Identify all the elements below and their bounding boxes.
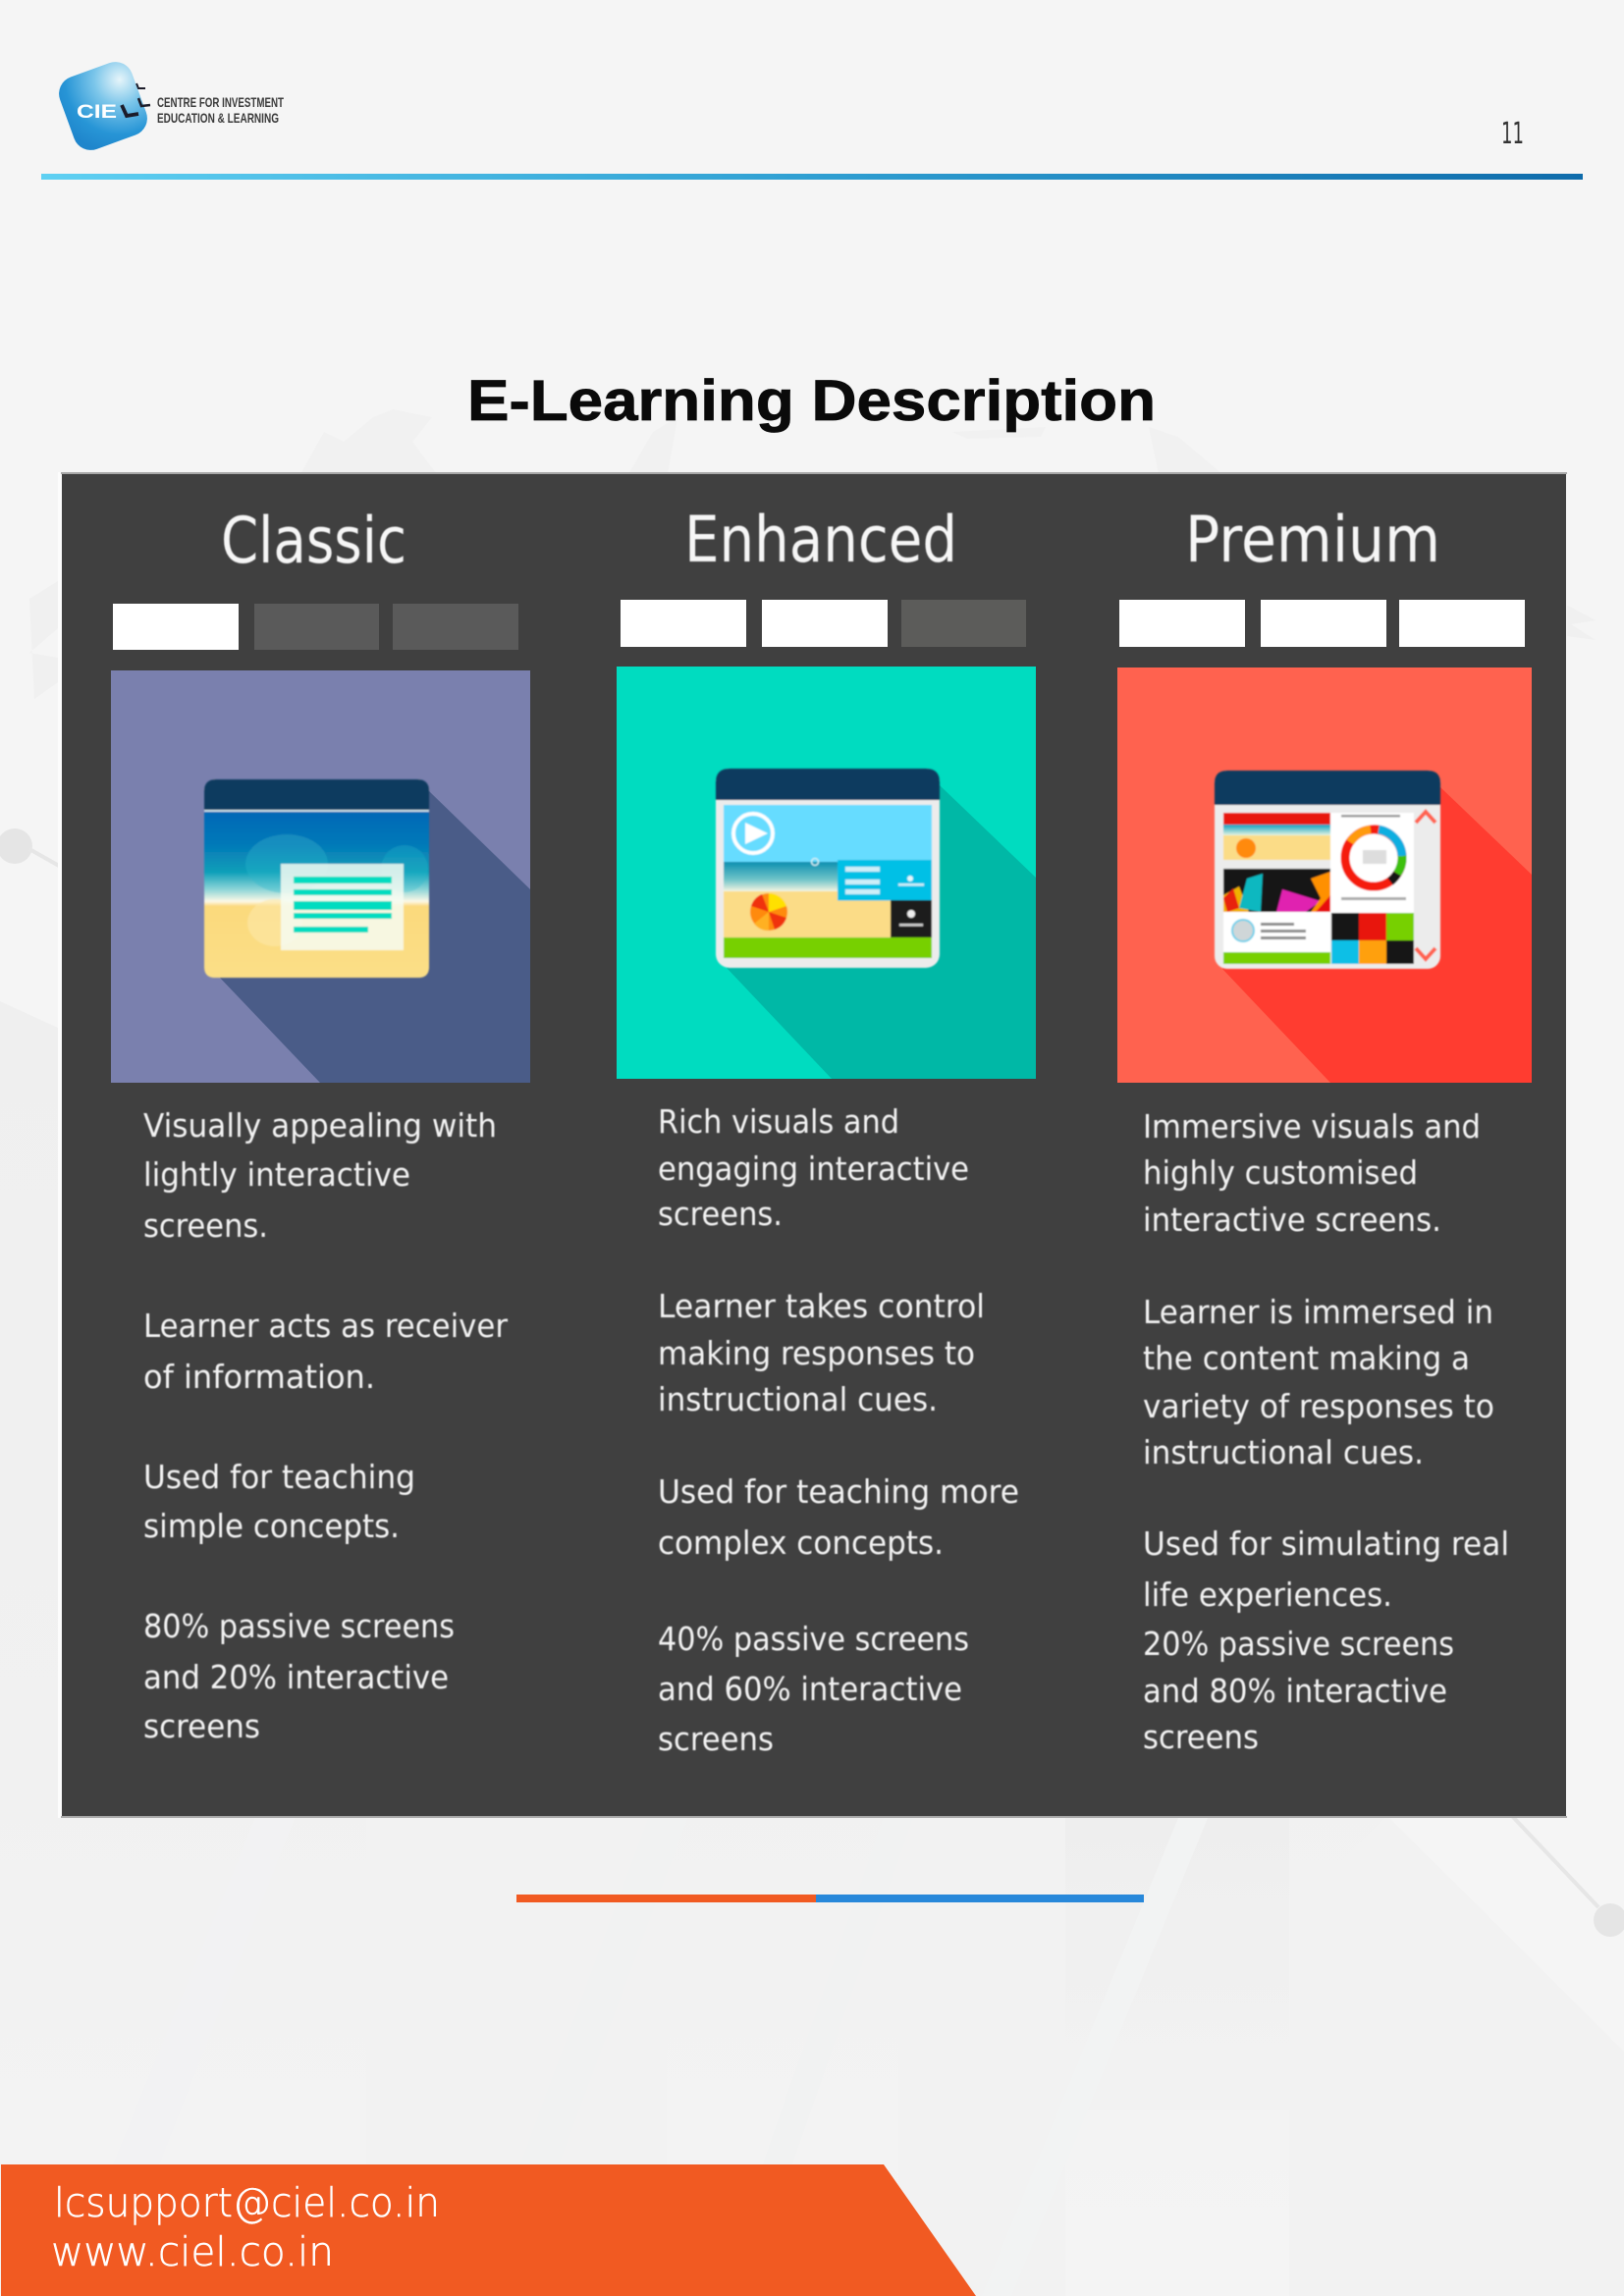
heading: Premium: Premium <box>1185 504 1440 577</box>
text block: enhanced description: and 60% interactive <box>658 1670 962 1708</box>
text block: classic description: and 20% interactive <box>143 1658 449 1696</box>
column: Classic <box>111 505 530 1745</box>
footer email: lcsupport@ciel.co.in <box>54 2179 440 2226</box>
text block: enhanced description: 40% passive screens <box>658 1620 969 1658</box>
text block: classic description: simple concepts. <box>143 1507 400 1545</box>
text block: enhanced description <box>658 1102 1019 1758</box>
logo wordmark <box>157 94 284 126</box>
text block: classic description: 80% passive screens <box>143 1607 455 1645</box>
text block: enhanced description: Rich visuals and <box>658 1102 899 1141</box>
text block: premium description: and 80% interactive <box>1143 1672 1447 1710</box>
column: Premium <box>1117 504 1532 1756</box>
text block: enhanced description: instructional cues. <box>658 1380 938 1418</box>
illustration: premium screen tile <box>1117 667 1532 1083</box>
illustration: enhanced screen tile <box>617 667 1036 1079</box>
text block: enhanced description: engaging interactive <box>658 1149 969 1188</box>
text block: classic description: Learner acts as receiver <box>143 1307 508 1345</box>
footer: contact banner <box>1 2164 976 2296</box>
text block: enhanced description: screens <box>658 1720 774 1758</box>
text block: premium description: 20% passive screens <box>1143 1625 1454 1663</box>
text block: premium description: variety of responses to <box>1143 1387 1494 1425</box>
text block: premium description: instructional cues. <box>1143 1433 1424 1471</box>
level indicator: two of three <box>621 600 1026 647</box>
text block: premium description: Learner is immersed in <box>1143 1293 1493 1331</box>
accent bar <box>516 1895 1144 1902</box>
text block: enhanced description: complex concepts. <box>658 1523 944 1562</box>
text block: premium description: highly customised <box>1143 1153 1418 1192</box>
text block: premium description: Immersive visuals and <box>1143 1107 1481 1146</box>
heading: Classic: Classic <box>221 505 406 578</box>
level indicator: three of three <box>1119 600 1525 647</box>
text block: classic description: Visually appealing with <box>143 1106 497 1145</box>
text block: classic description: screens. <box>143 1206 268 1245</box>
illustration: classic screen tile <box>111 670 530 1083</box>
header rule <box>41 174 1583 180</box>
text block: premium description: Used for simulating real <box>1143 1524 1509 1563</box>
text block: enhanced description: Used for teaching more <box>658 1472 1019 1511</box>
text block: enhanced description: screens. <box>658 1195 783 1233</box>
column: Enhanced <box>617 504 1036 1758</box>
header: logo and organisation name <box>54 57 284 155</box>
logo wordmark: EDUCATION & LEARNING <box>157 110 279 126</box>
text block: premium description: screens <box>1143 1718 1259 1756</box>
text block: classic description: Used for teaching <box>143 1458 415 1496</box>
level indicator: one of three <box>113 604 518 650</box>
panel: e-learning level comparison <box>58 472 1567 1818</box>
text block: premium description: life experiences. <box>1143 1575 1392 1614</box>
title: E-Learning Description <box>467 369 1156 433</box>
footer website: www.ciel.co.in <box>51 2228 334 2275</box>
text block: classic description: lightly interactive <box>143 1155 410 1194</box>
icon: CIEL logo badge: CIE <box>77 102 117 123</box>
text block: enhanced description: making responses to <box>658 1334 975 1372</box>
text block: premium description: interactive screens. <box>1143 1201 1441 1239</box>
text block: classic description: screens <box>143 1707 260 1745</box>
text block: enhanced description: Learner takes control <box>658 1287 985 1325</box>
text block: classic description <box>143 1106 508 1745</box>
page number: 11 <box>1501 117 1524 151</box>
icon: CIEL logo badge <box>54 57 152 155</box>
text block: premium description: the content making a <box>1143 1339 1470 1377</box>
text block: classic description: of information. <box>143 1358 375 1396</box>
heading: Enhanced: Enhanced <box>684 504 957 577</box>
text block: premium description <box>1143 1107 1509 1756</box>
logo wordmark: CENTRE FOR INVESTMENT <box>157 94 284 110</box>
